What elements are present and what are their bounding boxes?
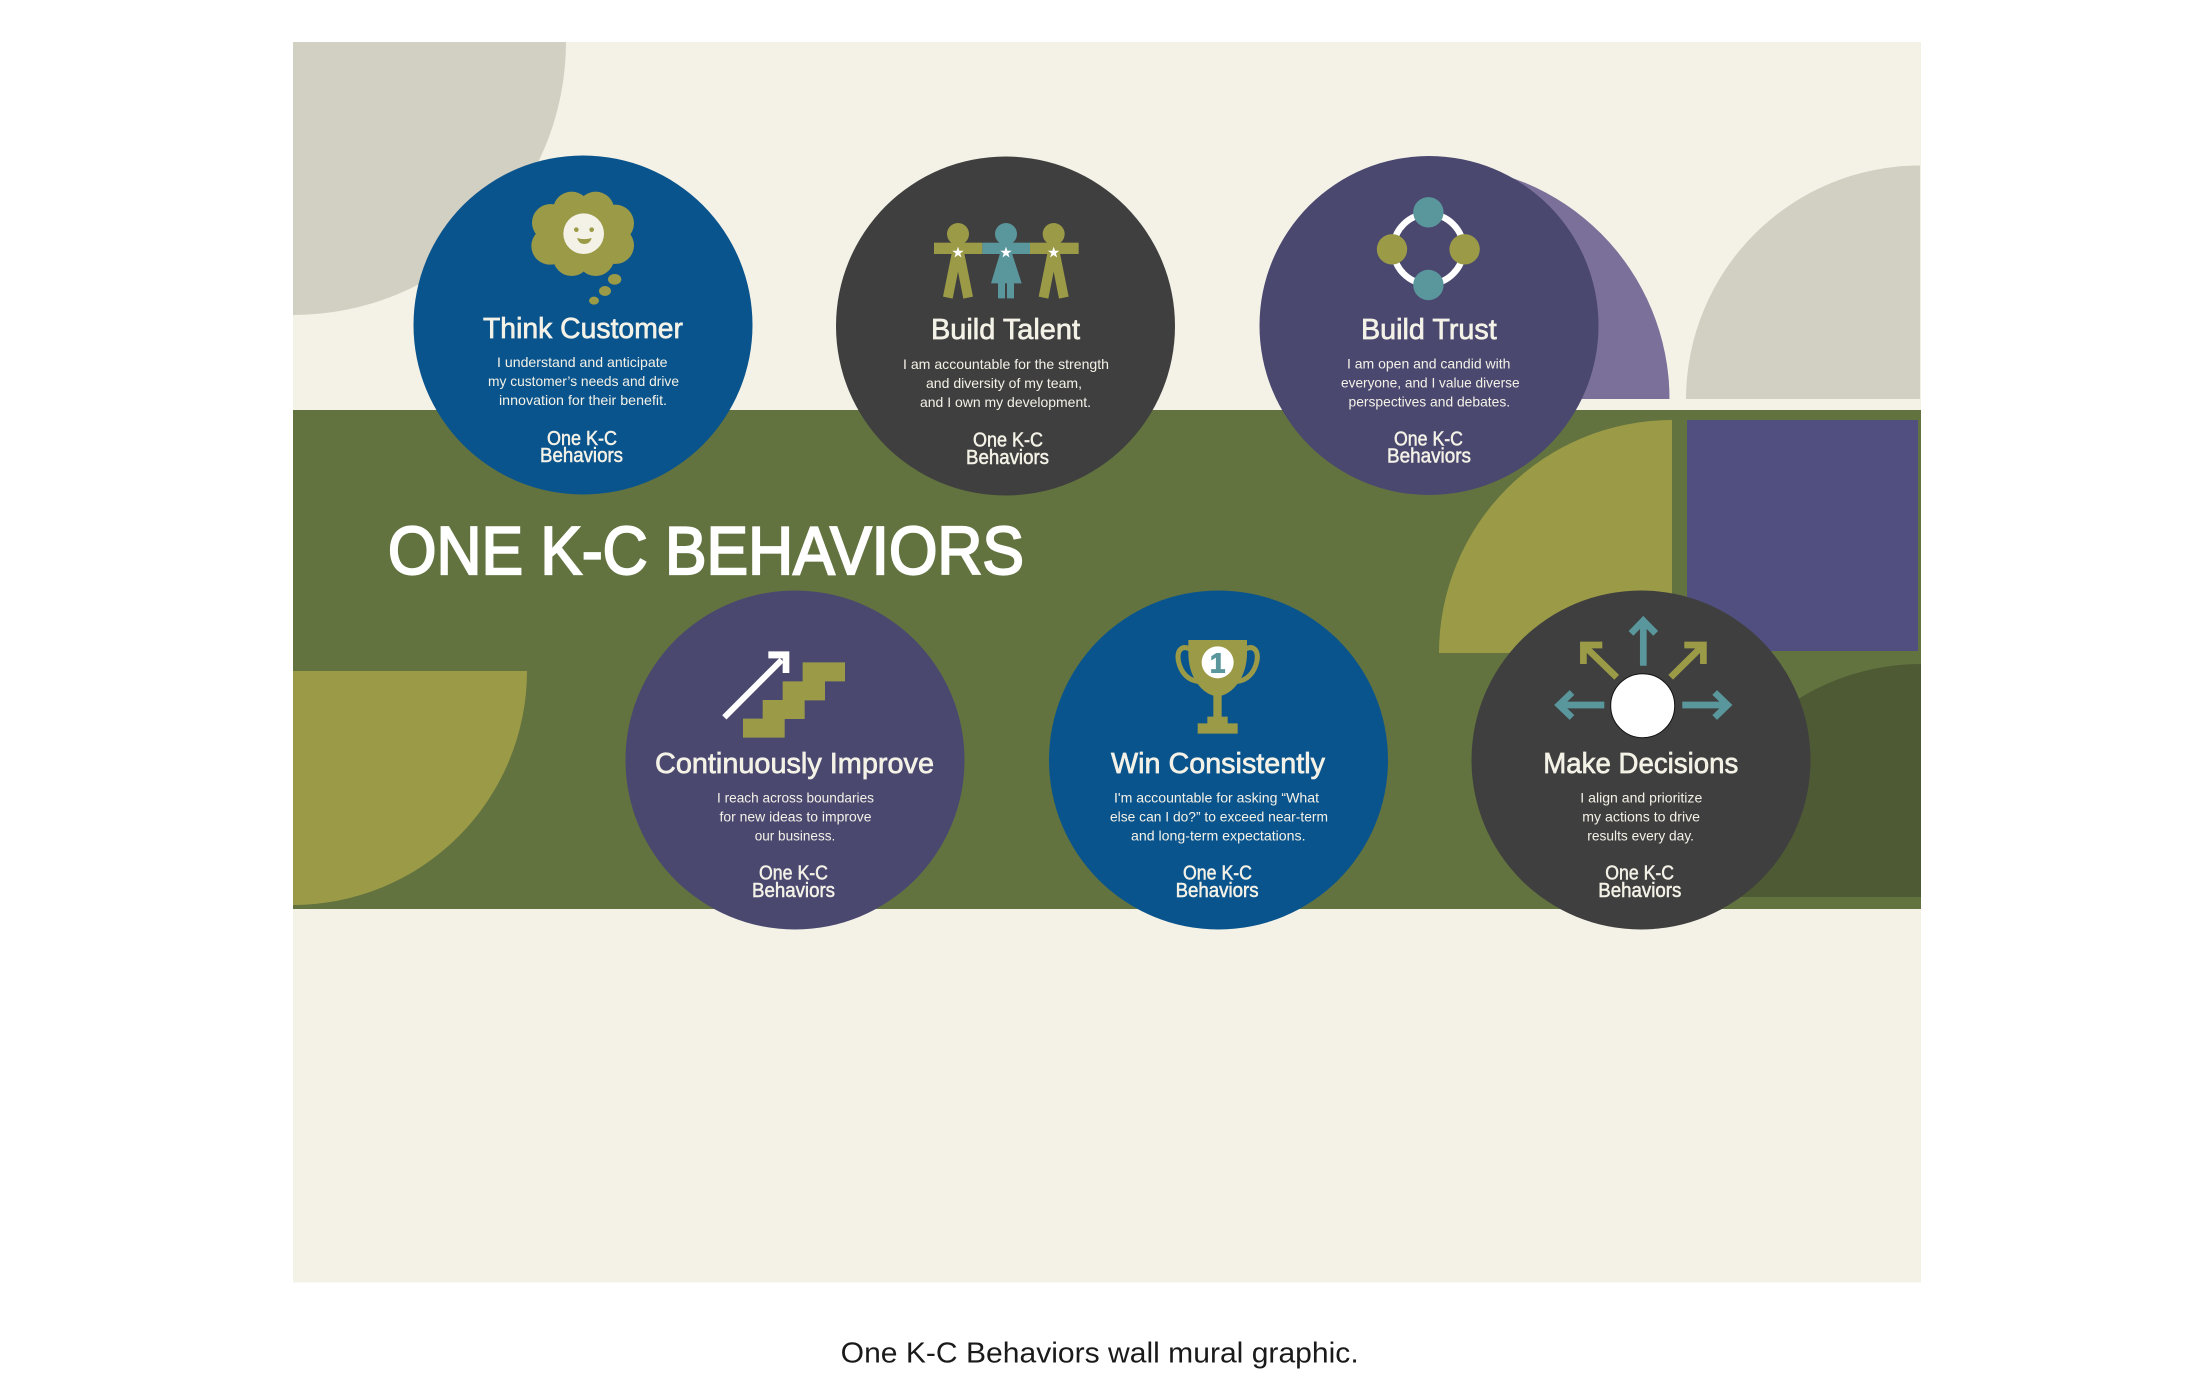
text block: Make Decisions description: results every day.: [1587, 828, 1694, 844]
label: One K-C Behaviors: Behaviors: [1598, 880, 1681, 902]
icon: thought cloud with smiling face: [531, 192, 634, 305]
text block: Build Talent description: [903, 356, 1109, 410]
label: One K-C Behaviors: [540, 428, 623, 467]
text block: Build Talent description: I am accountable for the strength: [903, 356, 1109, 372]
icon: circle with radiating arrows: [1559, 621, 1728, 738]
label: One K-C Behaviors: Behaviors: [1387, 446, 1471, 468]
text block: Continuously Improve description: I reach across boundaries: [717, 790, 874, 806]
icon: three people holding hands: [934, 223, 1079, 299]
label: One K-C Behaviors: Behaviors: [966, 447, 1049, 469]
label: One K-C Behaviors: [966, 430, 1049, 469]
text block: Build Trust description: I am open and candid with: [1347, 356, 1510, 372]
panel: Make Decisions: [1472, 590, 1810, 930]
shape: olive quarter circle right: [1439, 420, 1672, 653]
heading: Continuously Improve: Continuously Improve: [655, 748, 934, 780]
panel: Win Consistently: [1049, 590, 1388, 930]
text block: Win Consistently description: [1110, 790, 1328, 844]
shape: light purple quarter circle: [1436, 165, 1670, 399]
heading: Build Talent: Build Talent: [931, 314, 1080, 346]
heading: Think Customer: Think Customer: [483, 313, 683, 345]
text block: Build Trust description: everyone, and I value diverse: [1341, 374, 1520, 390]
panel: Think Customer: [414, 156, 752, 494]
shape: tan quarter circle top left: [293, 42, 566, 315]
text block: Build Talent description: and I own my development.: [920, 394, 1091, 410]
text block: Build Trust description: perspectives and debates.: [1348, 394, 1510, 410]
label: One K-C Behaviors: Behaviors: [540, 445, 623, 467]
label: One K-C Behaviors: Behaviors: [1176, 880, 1259, 902]
panel: Build Trust: [1260, 156, 1598, 495]
text block: Win Consistently description: else can I do?” to exceed near-term: [1110, 808, 1328, 824]
label: One K-C Behaviors: [752, 862, 835, 902]
label: One K-C Behaviors: [1176, 862, 1259, 902]
text block: Make Decisions description: [1580, 790, 1703, 844]
label: One K-C Behaviors: One K-C: [1183, 862, 1252, 884]
panel: Build Talent: [836, 156, 1175, 496]
text block: Build Talent description: and diversity of my team,: [926, 375, 1082, 391]
text block: Win Consistently description: I'm accountable for asking “What: [1114, 790, 1319, 806]
text block: Think Customer description: innovation for their benefit.: [499, 392, 667, 408]
icon: trophy with number one: 1: [1210, 648, 1225, 679]
shape: tan quarter circle top right: [1686, 166, 1920, 399]
icon: trophy with number one: [1178, 640, 1257, 734]
shape: purple square: [1687, 420, 1918, 651]
label: One K-C Behaviors: [1598, 862, 1681, 902]
text block: Think Customer description: [488, 354, 679, 408]
label: One K-C Behaviors: One K-C: [759, 862, 828, 884]
label: One K-C Behaviors: One K-C: [1605, 862, 1674, 884]
text block: Make Decisions description: I align and prioritize: [1580, 790, 1703, 806]
label: One K-C Behaviors: Behaviors: [752, 880, 835, 902]
shape: olive quarter circle left: [293, 671, 527, 905]
text block: Win Consistently description: and long-term expectations.: [1131, 828, 1306, 844]
shape: dark green quarter circle: [1688, 664, 1921, 897]
green band: [293, 410, 1921, 909]
mural background panel: [293, 42, 1921, 1282]
panel: Continuously Improve: [626, 590, 964, 930]
heading: Build Trust: Build Trust: [1361, 314, 1497, 346]
text block: Make Decisions description: my actions to drive: [1582, 808, 1700, 824]
text block: Continuously Improve description: [717, 790, 874, 844]
text block: Think Customer description: my customer’s needs and drive: [488, 373, 679, 389]
heading: Make Decisions: Make Decisions: [1543, 748, 1738, 780]
label: One K-C Behaviors: One K-C: [547, 428, 617, 450]
text block: Continuously Improve description: our business.: [755, 828, 835, 844]
text block: Continuously Improve description: for new ideas to improve: [720, 808, 872, 824]
icon: ring of four connected circles: [1377, 197, 1480, 300]
label: One K-C Behaviors: One K-C: [1394, 428, 1463, 450]
icon: stairs with rising arrow: [724, 651, 845, 738]
label: One K-C Behaviors: One K-C: [973, 430, 1043, 452]
caption: One K-C Behaviors wall mural graphic.: [841, 1338, 1359, 1370]
heading: Win Consistently: Win Consistently: [1111, 748, 1325, 780]
text block: Think Customer description: I understand and anticipate: [497, 354, 668, 370]
label: One K-C Behaviors: [1387, 428, 1471, 468]
text block: Build Trust description: [1341, 356, 1520, 410]
main title: ONE K-C BEHAVIORS: [388, 513, 1024, 589]
